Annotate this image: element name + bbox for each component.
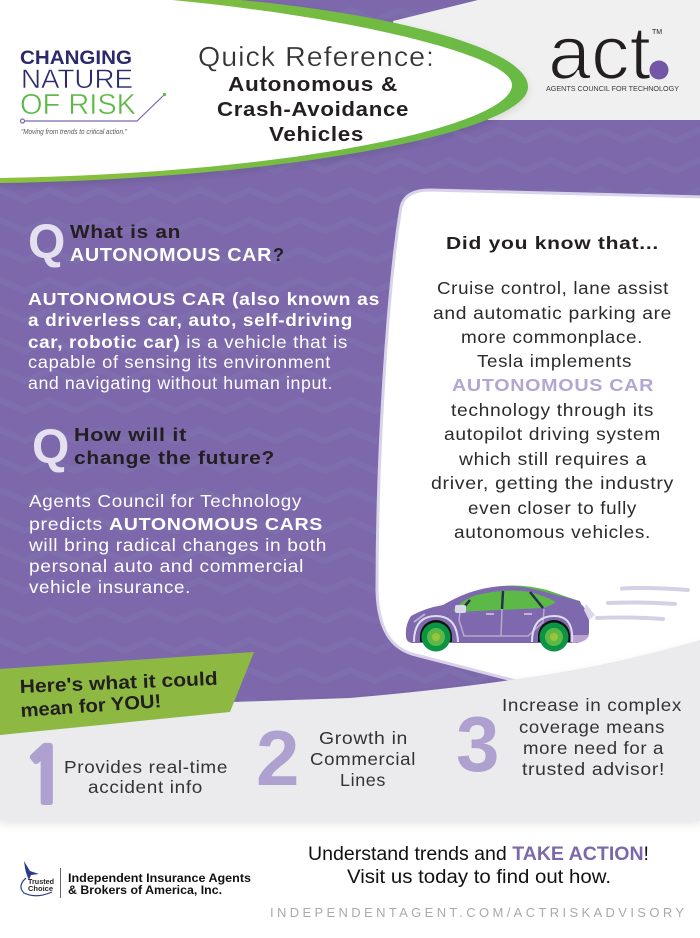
logo: act: act [548, 11, 651, 96]
definition paragraph: a driverless car, auto, self-driving [28, 310, 353, 330]
benefit 1: Provides real-time [64, 757, 228, 777]
did you know text: Cruise control, lane assist [437, 278, 669, 298]
divider: logo separator [60, 868, 61, 898]
question 2: change the future? [74, 448, 275, 468]
definition paragraph [28, 289, 380, 393]
logo: trusted choice: Choice [28, 886, 53, 893]
benefit 2: Lines [340, 770, 386, 790]
did you know text: and automatic parking are [433, 303, 672, 323]
logo: act: AGENTS COUNCIL FOR TECHNOLOGY [546, 86, 679, 93]
grey benefits band [0, 640, 700, 821]
logo: changing nature of risk: "Moving from trends to critical action." [21, 127, 127, 136]
did you know text [431, 278, 674, 542]
question 1: AUTONOMOUS CAR [70, 245, 272, 265]
logo: changing nature of risk [20, 47, 166, 136]
call to action [308, 844, 649, 888]
logo: trusted choice [21, 861, 54, 896]
benefit 3 [456, 695, 682, 788]
did you know text: AUTONOMOUS CAR [452, 375, 654, 395]
did you know text: technology through its [451, 400, 654, 420]
future paragraph [28, 491, 327, 597]
benefit 2: Commercial [310, 749, 416, 769]
question 2: How will it [74, 425, 187, 445]
did you know text: Tesla implements [477, 351, 632, 371]
grey header corner [393, 0, 700, 120]
benefit 1: accident info [88, 777, 203, 797]
did you know text: even closer to fully [468, 498, 637, 518]
logo: changing nature of risk: CHANGING [20, 47, 132, 69]
question 1: Q [28, 216, 65, 269]
banner text [19, 669, 218, 722]
definition paragraph: capable of sensing its environment [28, 352, 331, 372]
title: Vehicles [269, 124, 364, 146]
heading: did you know: Did you know that... [446, 233, 659, 253]
benefit 3: coverage means [519, 717, 665, 737]
question 1: ? [273, 245, 284, 265]
icon: car [406, 585, 688, 652]
question 2 [32, 421, 275, 474]
call to action: Visit us today to find out how. [347, 867, 611, 888]
logo: changing nature of risk: OF RISK [20, 89, 137, 121]
title: Crash-Avoidance [217, 99, 409, 121]
website url: INDEPENDENTAGENT.COM/ACTRISKADVISORY [270, 905, 684, 920]
did you know text: autopilot driving system [444, 424, 661, 444]
logo: trusted choice: Trusted [28, 879, 54, 886]
green banner [0, 652, 254, 735]
white panel: did you know [377, 190, 700, 681]
future paragraph: predicts AUTONOMOUS CARS [29, 514, 323, 534]
title: Autonomous & [228, 74, 398, 96]
benefit 1: 1 [22, 740, 68, 815]
banner text: mean for YOU! [20, 691, 162, 722]
title [198, 41, 435, 146]
definition paragraph: and navigating without human input. [28, 373, 333, 393]
logo: act: TM [652, 29, 662, 36]
title: Quick Reference: [198, 41, 435, 72]
header white ellipse with green rim [0, 0, 528, 183]
benefit 3: trusted advisor! [522, 759, 665, 779]
organisation name [68, 871, 251, 897]
benefit 3: 3 [456, 700, 499, 788]
did you know text: autonomous vehicles. [454, 522, 651, 542]
benefit 1 [22, 740, 228, 815]
did you know text: driver, getting the industry [431, 473, 674, 493]
future paragraph: will bring radical changes in both [28, 535, 327, 555]
definition paragraph: AUTONOMOUS CAR (also known as [28, 289, 380, 309]
definition paragraph: car, robotic car) is a vehicle that is [28, 332, 348, 352]
question 1 [28, 216, 284, 269]
did you know text: more commonplace. [461, 327, 643, 347]
organisation name: & Brokers of America, Inc. [68, 883, 222, 897]
banner text: Here's what it could [19, 669, 218, 698]
future paragraph: personal auto and commercial [29, 556, 304, 576]
benefit 2: Growth in [319, 728, 408, 748]
benefit 2 [256, 714, 416, 802]
future paragraph: vehicle insurance. [29, 577, 191, 597]
benefit 2: 2 [256, 714, 299, 802]
did you know text: which still requires a [458, 449, 647, 469]
question 1: What is an [70, 222, 181, 242]
future paragraph: Agents Council for Technology [29, 491, 302, 511]
benefit 3: more need for a [523, 738, 664, 758]
organisation name: Independent Insurance Agents [68, 871, 251, 885]
call to action: Understand trends and TAKE ACTION! [308, 844, 649, 865]
question 2: Q [32, 421, 69, 474]
benefit 3: Increase in complex [502, 695, 682, 715]
logo: changing nature of risk: NATURE [21, 64, 133, 94]
